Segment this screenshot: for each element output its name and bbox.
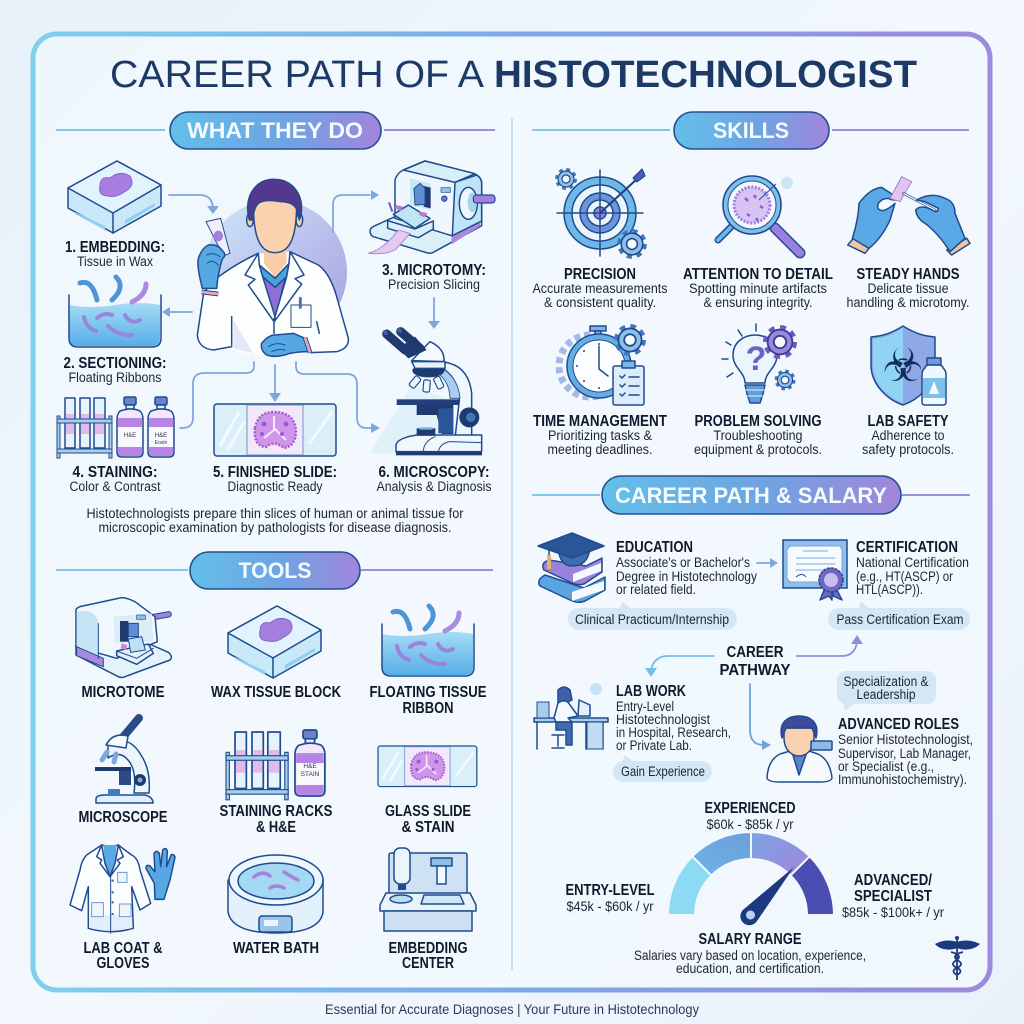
skill icon: problem solving bulb (722, 324, 794, 403)
icon: staining rack and bottles: Eosin (155, 440, 167, 446)
icon: staining rack and bottles: H&E (155, 433, 167, 439)
salary gauge (668, 832, 834, 925)
footer tagline: Essential for Accurate Diagnoses | Your Future in Histotechnology (325, 1001, 699, 1017)
heading: tools (56, 552, 493, 589)
skill: time management text (533, 413, 667, 457)
arrow: education to certification (757, 558, 778, 568)
certification text: National Certification (856, 555, 969, 570)
skill: attention to detail text: ATTENTION TO DETAIL (683, 266, 833, 283)
label: lab coat and gloves: LAB COAT & (84, 940, 162, 957)
step 3 label: 3. MICROTOMY: (382, 262, 486, 279)
step 2 label: Floating Ribbons (68, 370, 162, 385)
lab work text: Entry-Level (616, 699, 674, 714)
icon: advanced role professional (767, 716, 832, 782)
tool: water bath (228, 855, 323, 933)
step 2 label (64, 355, 166, 385)
advanced roles text: ADVANCED ROLES (838, 716, 959, 733)
salary label: advanced specialist (842, 872, 944, 920)
title: CAREER PATH OF A (110, 54, 485, 96)
icon: microtome large (368, 161, 495, 254)
label: lab coat and gloves: GLOVES (96, 955, 150, 972)
salary label: advanced specialist: $85k - $100k+ / yr (842, 905, 944, 920)
tool: microtome (76, 598, 171, 677)
skill: lab safety text: safety protocols. (862, 442, 954, 457)
skill icon: lab safety shield: ☣ (882, 338, 924, 392)
heading: career path and salary (532, 476, 970, 514)
description text: microscopic examination by pathologists for disease diagnosis. (98, 520, 452, 535)
certification text: (e.g., HT(ASCP) or (856, 569, 953, 584)
skill icon: lab safety shield (871, 326, 946, 405)
skill: lab safety text (862, 413, 954, 457)
label: glass slide: GLASS SLIDE (385, 803, 471, 820)
icon: wax block embedding (68, 161, 161, 233)
education text: or related field. (616, 582, 696, 597)
icon: staining rack and bottles (57, 397, 174, 458)
label: glass slide (385, 803, 471, 836)
skill: steady hands text: Delicate tissue (868, 281, 948, 296)
icon: caduceus (935, 936, 980, 980)
step 1 label (65, 239, 165, 269)
label: microscope: MICROSCOPE (78, 809, 168, 826)
skill: attention to detail text: & ensuring integrity. (704, 295, 812, 310)
tool: staining racks: STAIN (301, 771, 320, 778)
heading: what they do (56, 112, 495, 149)
skill icon: steady gloved hands (848, 177, 970, 255)
callout: clinical practicum: Clinical Practicum/Internship (575, 612, 729, 627)
career pathway label: PATHWAY (720, 662, 791, 679)
advanced roles text: Senior Histotechnologist, (838, 732, 973, 747)
tool: floating tissue ribbon (382, 606, 474, 676)
skill: problem solving text: equipment & protocols. (694, 442, 822, 457)
icon: microscope large (370, 327, 482, 455)
education text: Degree in Histotechnology (616, 569, 757, 584)
step 6 label: 6. MICROSCOPY: (378, 464, 490, 481)
lab work text (616, 683, 731, 753)
step 4 label: Color & Contrast (70, 479, 161, 494)
label: lab coat and gloves (84, 940, 162, 972)
label: staining racks: & H&E (256, 819, 296, 836)
heading: tools: TOOLS (238, 558, 312, 583)
step 6 label (376, 464, 492, 494)
skill: time management text: Prioritizing tasks & (548, 428, 652, 443)
salary label: entry level: $45k - $60k / yr (566, 899, 654, 914)
step 1 label: Tissue in Wax (77, 254, 153, 269)
salary label: advanced specialist: ADVANCED/ (854, 872, 933, 889)
skill: precision text: Accurate measurements (532, 281, 668, 296)
skill: steady hands text: STEADY HANDS (856, 266, 960, 283)
step 5 label: Diagnostic Ready (228, 479, 323, 494)
skill icon: magnifier (718, 176, 800, 253)
tool: wax tissue block (228, 606, 321, 678)
salary label: entry level: ENTRY-LEVEL (566, 882, 654, 899)
tool: glass slide (378, 746, 477, 787)
skill: lab safety text: Adherence to (872, 428, 944, 443)
salary label: entry level (566, 882, 654, 914)
step 6 label: Analysis & Diagnosis (376, 479, 492, 494)
skill: attention to detail text (683, 266, 833, 310)
salary range note: SALARY RANGE (698, 931, 802, 948)
education text: EDUCATION (616, 539, 693, 556)
callout: clinical practicum (568, 601, 737, 630)
advanced roles text: Supervisor, Lab Manager, (838, 746, 971, 761)
salary label: advanced specialist: SPECIALIST (854, 888, 932, 905)
step 4 label (70, 464, 161, 494)
salary label: experienced: $60k - $85k / yr (706, 817, 794, 832)
advanced roles text: Immunohistochemistry). (838, 772, 967, 787)
label: embedding center: CENTER (402, 955, 454, 972)
label: staining racks (220, 803, 332, 836)
label: floating tissue ribbon: RIBBON (402, 700, 454, 717)
arrows: workflow (162, 190, 440, 433)
callout: gain experience: Gain Experience (621, 764, 705, 779)
skill: attention to detail text: Spotting minute artifacts (689, 281, 827, 296)
label: embedding center (388, 940, 468, 972)
label: microtome: MICROTOME (82, 684, 164, 701)
tool: microscope (95, 718, 153, 803)
tool: staining racks (226, 730, 325, 800)
arrows: career pathway (645, 635, 863, 750)
lab work text: or Private Lab. (616, 738, 692, 753)
label: floating tissue ribbon (370, 684, 486, 717)
education text (616, 539, 757, 597)
label: floating tissue ribbon: FLOATING TISSUE (370, 684, 486, 701)
tool: staining racks: H&E (303, 763, 317, 770)
icon: lab work scientist at desk (534, 683, 608, 749)
skill: steady hands text: handling & microtomy. (846, 295, 970, 310)
career pathway label (720, 644, 791, 679)
step 1 label: 1. EMBEDDING: (65, 239, 165, 256)
advanced roles text (838, 716, 973, 787)
icon: floating ribbons tank (69, 277, 161, 347)
skill: precision text: & consistent quality. (544, 295, 656, 310)
step 5 label (213, 464, 337, 494)
skill icon: precision target (557, 169, 645, 256)
label: staining racks: STAINING RACKS (220, 803, 332, 820)
skill: lab safety text: LAB SAFETY (868, 413, 949, 430)
callout: gain experience (613, 755, 712, 782)
skill: problem solving text: PROBLEM SOLVING (694, 413, 822, 430)
salary range note: Salaries vary based on location, experience, (634, 948, 866, 963)
tool: embedding center (380, 848, 476, 931)
step 5 label: 5. FINISHED SLIDE: (213, 464, 337, 481)
lab work text: Histotechnologist (616, 712, 710, 727)
certification text: HTL(ASCP)). (856, 582, 923, 597)
step 3 label (382, 262, 486, 292)
skill: time management text: meeting deadlines. (548, 442, 652, 457)
skill: time management text: TIME MANAGEMENT (533, 413, 667, 430)
callout: pass certification exam: Pass Certification Exam (836, 612, 964, 627)
icon: staining rack and bottles: H&E (124, 433, 136, 439)
certification text: CERTIFICATION (856, 539, 958, 556)
heading: skills: SKILLS (713, 118, 789, 143)
step 4 label: 4. STAINING: (72, 464, 158, 481)
step 2 label: 2. SECTIONING: (64, 355, 166, 372)
title (110, 54, 917, 96)
label: wax tissue block: WAX TISSUE BLOCK (211, 684, 342, 701)
skill icon: time management (559, 326, 644, 405)
label: glass slide: & STAIN (402, 819, 454, 836)
description text (86, 506, 464, 535)
lab work text: LAB WORK (616, 683, 687, 700)
callout: pass certification exam (828, 601, 970, 630)
callout: specialization and leadership (837, 671, 936, 711)
callout: specialization and leadership: Leadership (856, 687, 916, 702)
salary range note (634, 931, 866, 976)
central technologist figure (197, 179, 348, 356)
skill: steady hands text (846, 266, 970, 310)
salary range note: education, and certification. (676, 961, 824, 976)
description text: Histotechnologists prepare thin slices of human or animal tissue for (86, 506, 464, 521)
title: HISTOTECHNOLOGIST (494, 54, 917, 96)
skill: precision text (532, 266, 668, 310)
career pathway label: CAREER (726, 644, 784, 661)
callout: specialization and leadership: Specialization & (844, 674, 928, 689)
salary label: experienced: EXPERIENCED (704, 800, 796, 817)
step 3 label: Precision Slicing (388, 277, 480, 292)
skill: problem solving text (694, 413, 822, 457)
salary label: experienced (704, 800, 796, 832)
skill: problem solving text: Troubleshooting (714, 428, 802, 443)
heading: career path and salary: CAREER PATH & SALARY (615, 483, 887, 508)
skill: precision text: PRECISION (564, 266, 636, 283)
icon: certificate (783, 540, 847, 600)
label: water bath: WATER BATH (233, 940, 319, 957)
heading: skills (532, 112, 969, 149)
education text: Associate's or Bachelor's (616, 555, 750, 570)
tool: lab coat and gloves (70, 845, 175, 933)
icon: education books and cap (538, 533, 605, 602)
certification text (856, 539, 969, 597)
advanced roles text: or Specialist (e.g., (838, 759, 934, 774)
heading: what they do: WHAT THEY DO (187, 118, 363, 143)
skill icon: problem solving bulb: ? (746, 340, 766, 378)
label: embedding center: EMBEDDING (388, 940, 468, 957)
lab work text: in Hospital, Research, (616, 725, 731, 740)
icon: finished slide (214, 404, 336, 456)
